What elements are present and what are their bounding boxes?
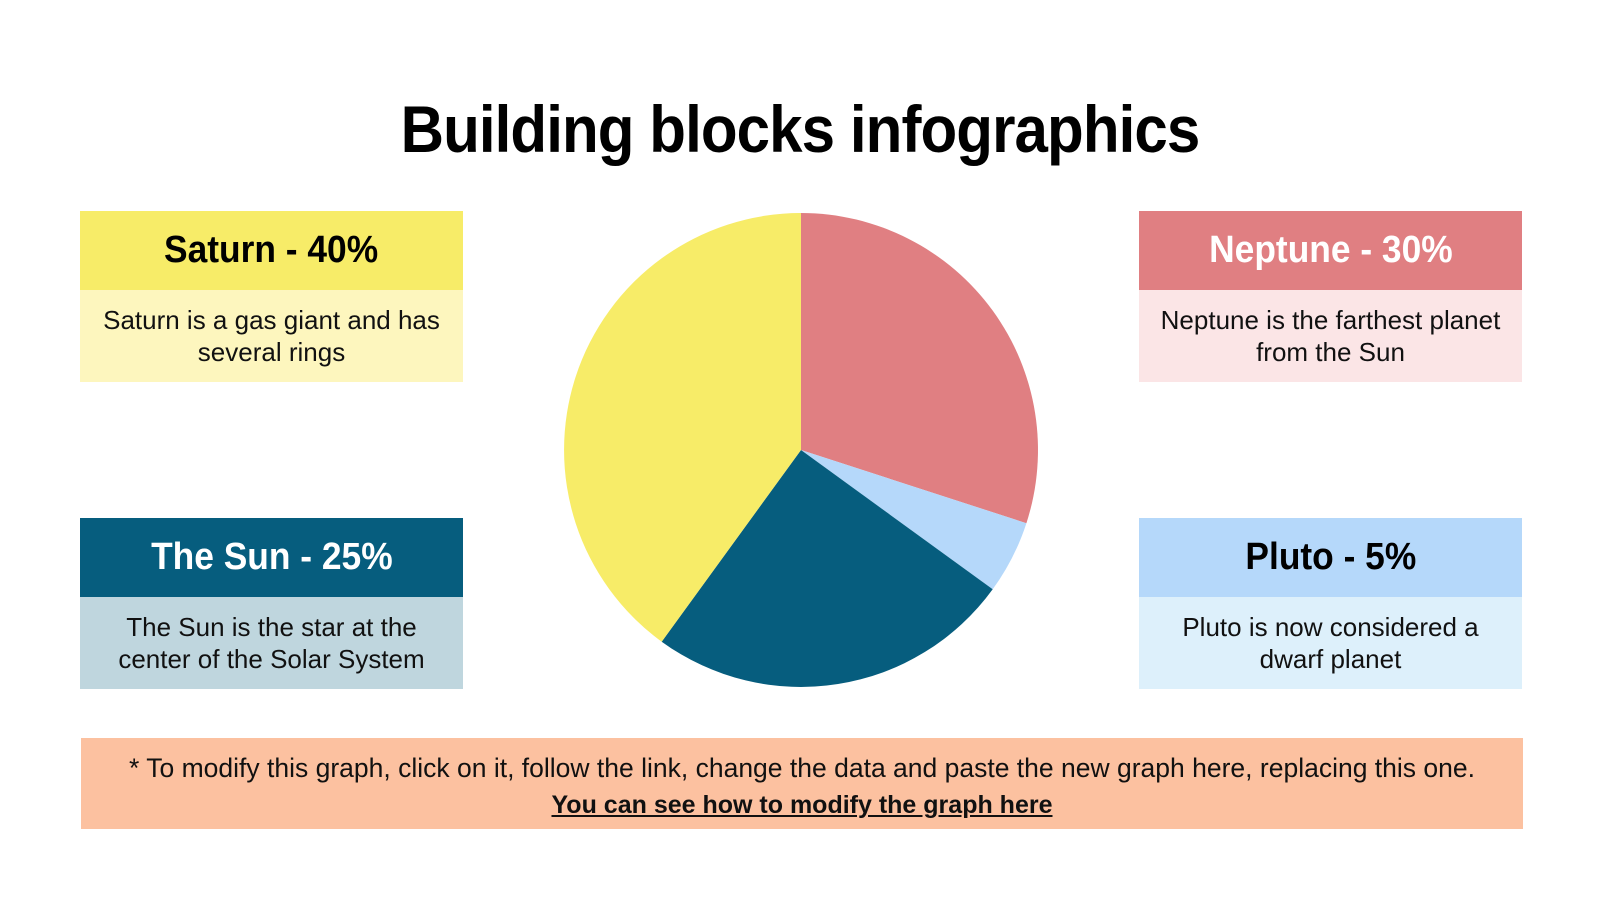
footer note: You can see how to modify the graph here [551, 791, 1052, 819]
text: sun: The Sun is the star at the [126, 612, 417, 642]
heading: sun [80, 518, 463, 597]
text: sun: center of the Solar System [118, 644, 425, 674]
heading: saturn [80, 211, 463, 290]
heading: saturn: Saturn - 40% [164, 229, 379, 271]
text: saturn: several rings [198, 337, 345, 367]
heading: sun: The Sun - 25% [151, 536, 392, 578]
heading: pluto: Pluto - 5% [1245, 536, 1416, 578]
text: pluto: Pluto is now considered a [1182, 612, 1479, 642]
panel: pluto [1139, 518, 1522, 689]
text: neptune: from the Sun [1256, 337, 1405, 367]
panel: saturn [80, 211, 463, 382]
text: saturn [80, 290, 463, 382]
panel: neptune [1139, 211, 1522, 382]
text: pluto: dwarf planet [1260, 644, 1401, 674]
heading: neptune: Neptune - 30% [1209, 229, 1452, 271]
footer note [81, 738, 1523, 829]
text: neptune: Neptune is the farthest planet [1161, 305, 1500, 335]
footer note: * To modify this graph, click on it, follow the link, change the data and paste the new graph here, replacing this one. [129, 753, 1475, 783]
heading: pluto [1139, 518, 1522, 597]
text: pluto [1139, 597, 1522, 689]
title: Building blocks infographics [401, 92, 1199, 166]
text: sun [80, 597, 463, 689]
heading: neptune [1139, 211, 1522, 290]
panel: sun [80, 518, 463, 689]
text: neptune [1139, 290, 1522, 382]
text: saturn: Saturn is a gas giant and has [103, 305, 440, 335]
